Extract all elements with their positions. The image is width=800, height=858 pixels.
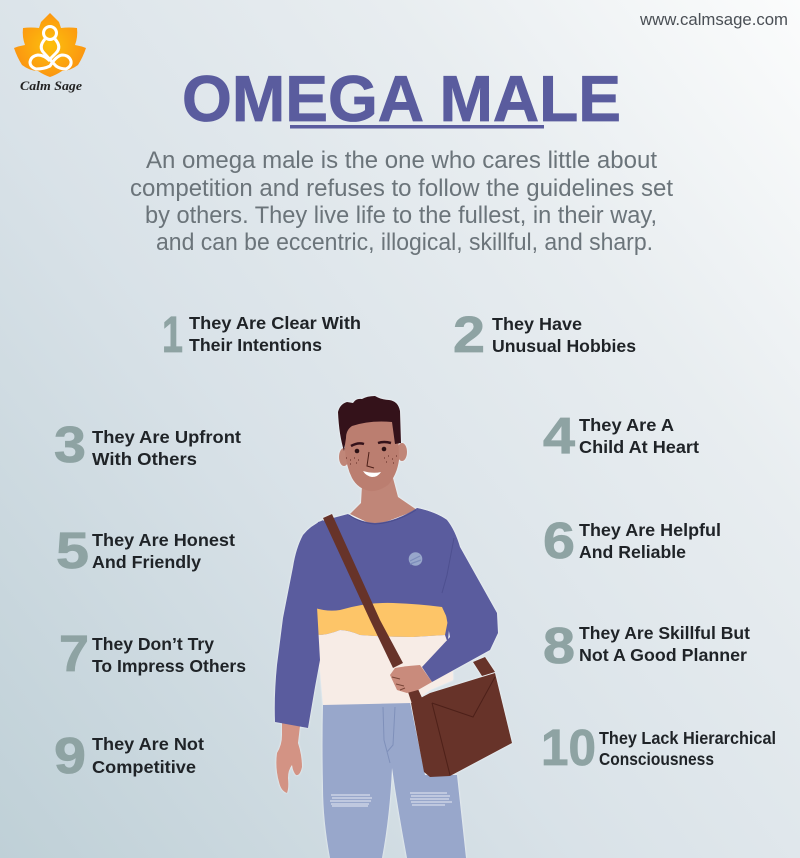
item 1 bbox=[162, 306, 361, 363]
item 1: They Are Clear With bbox=[189, 313, 361, 333]
item 3: They Are Upfront bbox=[92, 427, 241, 447]
right hand bbox=[390, 665, 432, 693]
freckles bbox=[346, 456, 397, 464]
face bbox=[345, 418, 399, 491]
item 9: They Are Not bbox=[92, 734, 204, 754]
illustration: man with shoulder bag bbox=[275, 396, 512, 858]
intro paragraph: by others. They live life to the fullest, in their way, bbox=[145, 202, 657, 229]
item 9: Competitive bbox=[92, 757, 196, 777]
item 10: They Lack Hierarchical bbox=[599, 728, 776, 748]
brand name: Calm Sage bbox=[20, 78, 82, 93]
intro paragraph bbox=[130, 147, 673, 256]
item 8: 8 bbox=[543, 617, 575, 674]
intro paragraph: and can be eccentric, illogical, skillful, and sharp. bbox=[156, 229, 653, 256]
item 2 bbox=[453, 306, 636, 363]
item 7: 7 bbox=[59, 625, 89, 682]
item 6: And Reliable bbox=[579, 542, 686, 562]
item 3 bbox=[54, 416, 241, 473]
messenger bag bbox=[411, 673, 512, 777]
logo: Calm Sage bbox=[14, 13, 86, 93]
left sleeve bbox=[275, 520, 323, 728]
item 10: 10 bbox=[541, 719, 596, 776]
item 6 bbox=[543, 512, 721, 569]
item 7: They Don’t Try bbox=[92, 634, 214, 654]
eyebrows and eyes bbox=[351, 442, 391, 446]
left hand bbox=[276, 722, 302, 793]
item 10 bbox=[541, 719, 776, 776]
item 5 bbox=[56, 522, 235, 579]
nose bbox=[367, 452, 374, 468]
item 6: 6 bbox=[543, 512, 575, 569]
intro paragraph: An omega male is the one who cares little about bbox=[146, 147, 657, 174]
item 9: 9 bbox=[54, 727, 86, 784]
item 5: They Are Honest bbox=[92, 530, 235, 550]
item 7 bbox=[59, 625, 246, 682]
item 4: They Are A bbox=[579, 415, 674, 435]
item 1: Their Intentions bbox=[189, 335, 322, 355]
sweater badge bbox=[409, 552, 422, 566]
hair bbox=[338, 396, 401, 451]
item 8 bbox=[543, 617, 750, 674]
item 9 bbox=[54, 727, 204, 784]
intro paragraph: competition and refuses to follow the guidelines set bbox=[130, 175, 673, 202]
item 6: They Are Helpful bbox=[579, 520, 721, 540]
item 4: Child At Heart bbox=[579, 437, 699, 457]
item 4 bbox=[543, 407, 699, 464]
title: OMEGA MALE bbox=[182, 62, 621, 135]
item 2: Unusual Hobbies bbox=[492, 336, 636, 356]
item 10: Consciousness bbox=[599, 749, 714, 769]
item 5: 5 bbox=[56, 522, 89, 579]
item 2: They Have bbox=[492, 314, 582, 334]
jeans bbox=[322, 702, 466, 858]
item 2: 2 bbox=[453, 306, 485, 363]
item 8: Not A Good Planner bbox=[579, 645, 747, 665]
sweater body bbox=[305, 508, 453, 705]
item 8: They Are Skillful But bbox=[579, 623, 750, 643]
website url: www.calmsage.com bbox=[639, 11, 788, 29]
item 5: And Friendly bbox=[92, 552, 201, 572]
right sleeve bbox=[417, 508, 498, 682]
ears bbox=[339, 448, 349, 466]
icon: lotus with meditating figure bbox=[14, 13, 86, 77]
smile bbox=[363, 471, 381, 477]
item 4: 4 bbox=[543, 407, 576, 464]
neck bbox=[350, 478, 417, 526]
item 7: To Impress Others bbox=[92, 656, 246, 676]
head bbox=[338, 396, 407, 491]
item 3: With Others bbox=[92, 449, 197, 469]
shoulder strap bbox=[323, 514, 495, 704]
item 1: 1 bbox=[162, 306, 183, 363]
item 3: 3 bbox=[54, 416, 86, 473]
